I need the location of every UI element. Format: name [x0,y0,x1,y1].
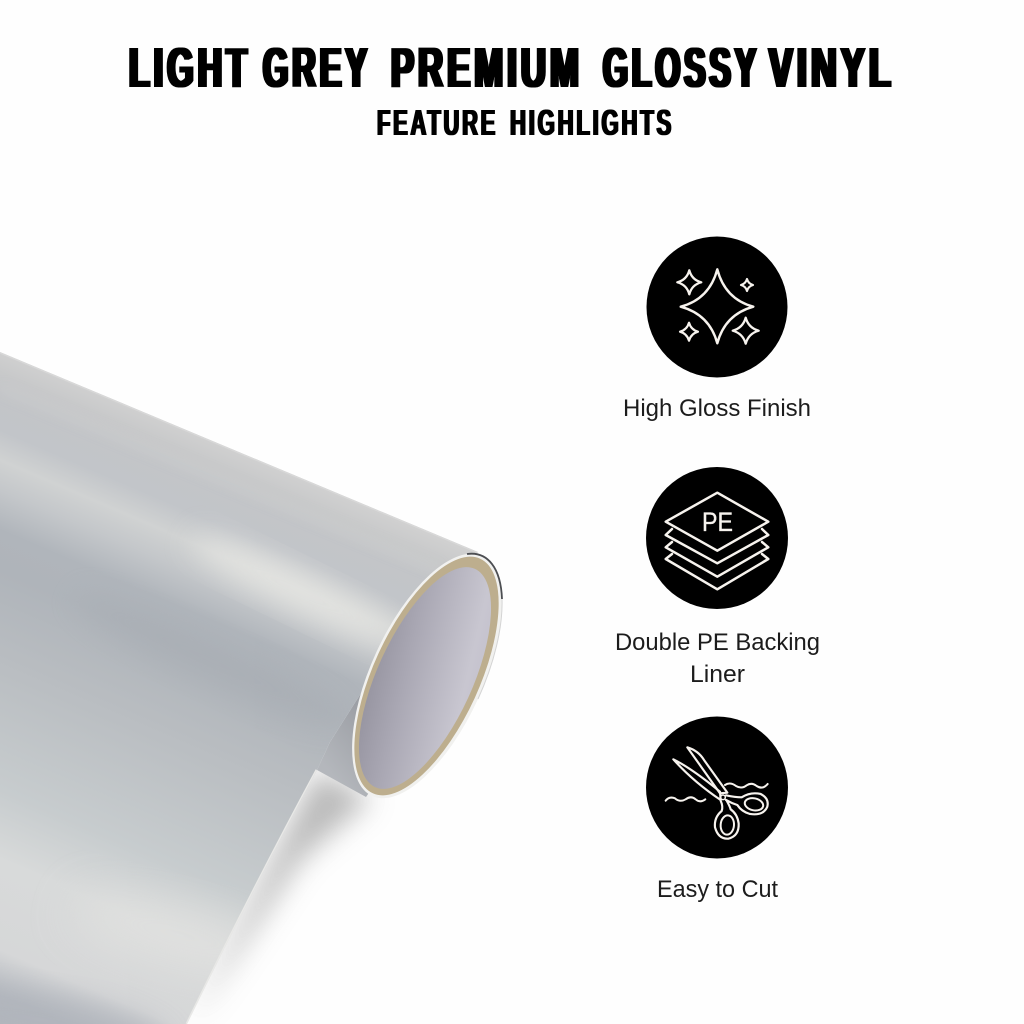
title [129,36,895,100]
subtitle [377,102,674,143]
label: easy to cut: Easy to Cut [657,876,778,903]
label: double PE backing liner: Double PE Backing [615,629,820,656]
icon: stacked PE layers [646,467,788,609]
title: PREMIUM [391,36,583,100]
title: GREY [263,36,371,100]
feature: high gloss finish [623,236,811,422]
vinyl roll illustration [0,352,533,1024]
feature: double PE backing liner [615,467,820,688]
roll shadow [190,770,372,1024]
label: double PE backing liner: Liner [690,661,745,688]
subtitle: HIGHLIGHTS [510,102,674,143]
title: GLOSSY [603,36,760,100]
icon: sparkles [646,236,788,378]
label: double PE backing liner [615,629,820,688]
label: high gloss finish: High Gloss Finish [623,395,811,422]
subtitle: FEATURE [377,102,498,143]
vinyl sheet [0,352,478,1024]
roll underside [317,690,420,797]
title: LIGHT [129,36,251,100]
feature: easy to cut [646,716,788,903]
icon: scissors [646,716,788,858]
icon: stacked PE layers: PE [702,507,733,537]
tube inner cavity [332,549,518,807]
tube end [321,533,533,819]
title: VINYL [769,36,895,100]
